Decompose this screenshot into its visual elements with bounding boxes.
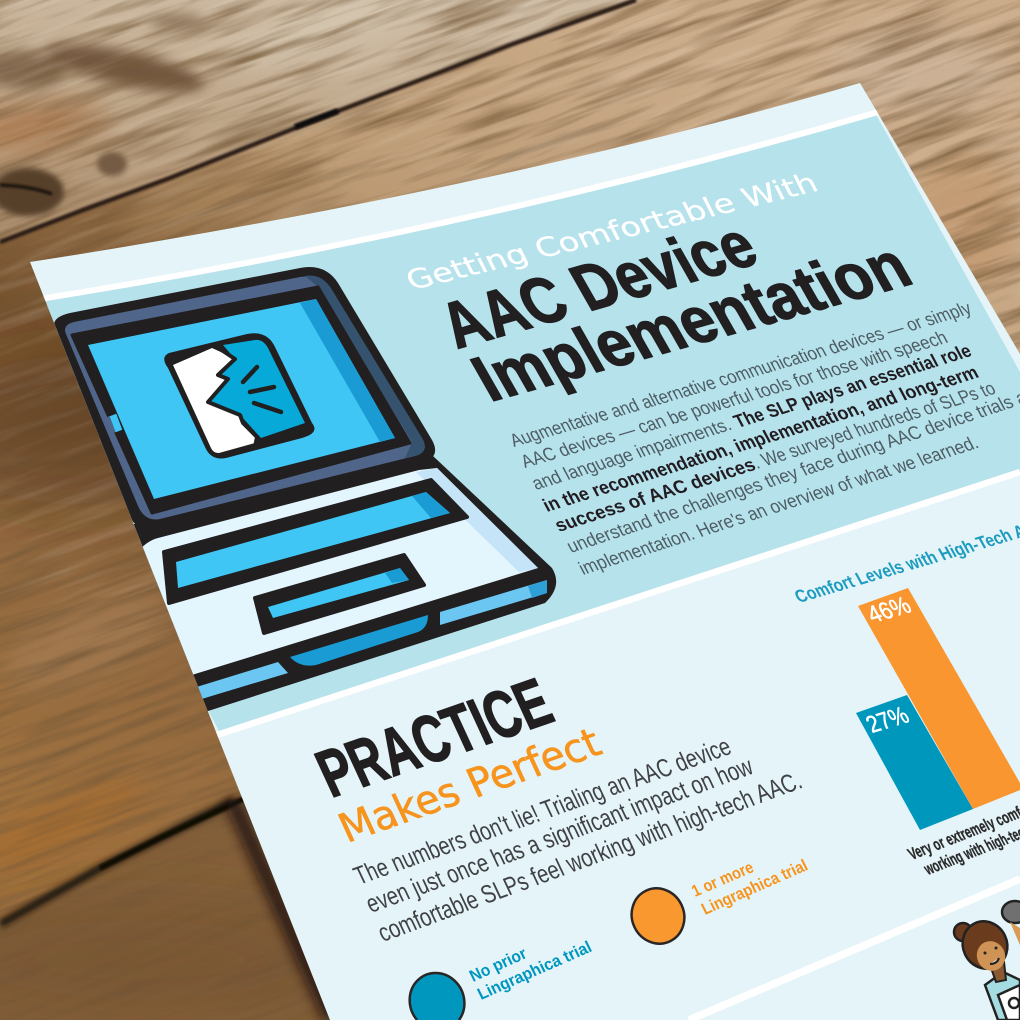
- laptop lid outline: [54, 267, 435, 531]
- panel: practice section: [322, 998, 330, 1020]
- screen: [88, 299, 395, 499]
- section rule lower: [689, 879, 1020, 1020]
- value 46%: 46%: [862, 592, 916, 628]
- screen bezel: [72, 287, 410, 513]
- axis caption: [906, 806, 1020, 875]
- intro paragraph: [506, 297, 1020, 579]
- second person head: [1002, 901, 1020, 923]
- intro paragraph: success of AAC devices: [551, 454, 759, 536]
- woman bun: [954, 923, 972, 941]
- legend: no prior trial: No prior: [466, 944, 530, 986]
- header kicker: Getting Comfortable With: [401, 168, 823, 297]
- base right shading: [416, 468, 538, 572]
- bar: 1 or more trial 46%: [858, 588, 1020, 809]
- value 27%: 27%: [861, 702, 914, 738]
- intro paragraph: AAC devices — can be powerful tools for those with speech: [517, 326, 951, 472]
- section rule: [214, 472, 1020, 736]
- icon: cracked app: [164, 333, 314, 459]
- lid shadow side: [305, 276, 425, 458]
- lid frame: [65, 276, 425, 519]
- touchpad: [255, 555, 424, 633]
- legend: no prior trial: Lingraphica trial: [474, 937, 595, 1004]
- illustration: people with device: [954, 901, 1020, 1020]
- heading: practice: PRACTICE: [305, 664, 563, 812]
- intro paragraph: in the recommendation, implementation, and long-term: [539, 361, 982, 516]
- woman hair: [955, 914, 1015, 976]
- front edge strips: [190, 580, 547, 701]
- header top rule: [40, 112, 878, 299]
- legend: 1 or more trial: 1 or more: [688, 858, 757, 901]
- bar chart: [856, 588, 1020, 879]
- panel: header: [45, 113, 1020, 733]
- legend: 1 or more trial: [630, 858, 808, 945]
- illustration: laptop: [54, 267, 556, 712]
- intro paragraph: and language impairments.: [528, 414, 735, 494]
- legend: no prior trial: [410, 937, 595, 1020]
- practice body text: The numbers don't lie! Trialing an AAC device: [349, 733, 736, 891]
- intro paragraph: The SLP plays an essential role: [730, 340, 975, 432]
- woman body: [985, 972, 1020, 1020]
- tablet: [998, 985, 1020, 1020]
- legend: 1 or more trial: Lingraphica trial: [698, 856, 811, 919]
- heading: makes perfect: Makes Perfect: [332, 720, 608, 852]
- intro paragraph: . We surveyed hundreds of SLPs to: [749, 377, 999, 473]
- intro paragraph: Augmentative and alternative communication devices — or simply: [506, 297, 976, 451]
- bar: no prior trial 27%: [856, 695, 973, 830]
- screen shade: [300, 299, 395, 442]
- practice body text: comfortable SLPs feel working with high-tech AAC.: [373, 767, 807, 948]
- laptop base deck: [136, 468, 538, 678]
- title line 1: AAC Device: [426, 207, 769, 362]
- practice body text: even just once has a significant impact on how: [361, 752, 758, 919]
- keyboard: [164, 480, 467, 603]
- intro paragraph: implementation. Here's an overview of what we learned.: [575, 432, 982, 579]
- woman neck: [990, 962, 1006, 982]
- title line 2: Implementation: [459, 228, 923, 415]
- hinge gap: [107, 415, 119, 433]
- laptop base outline: [130, 456, 556, 712]
- woman face: [972, 936, 1010, 976]
